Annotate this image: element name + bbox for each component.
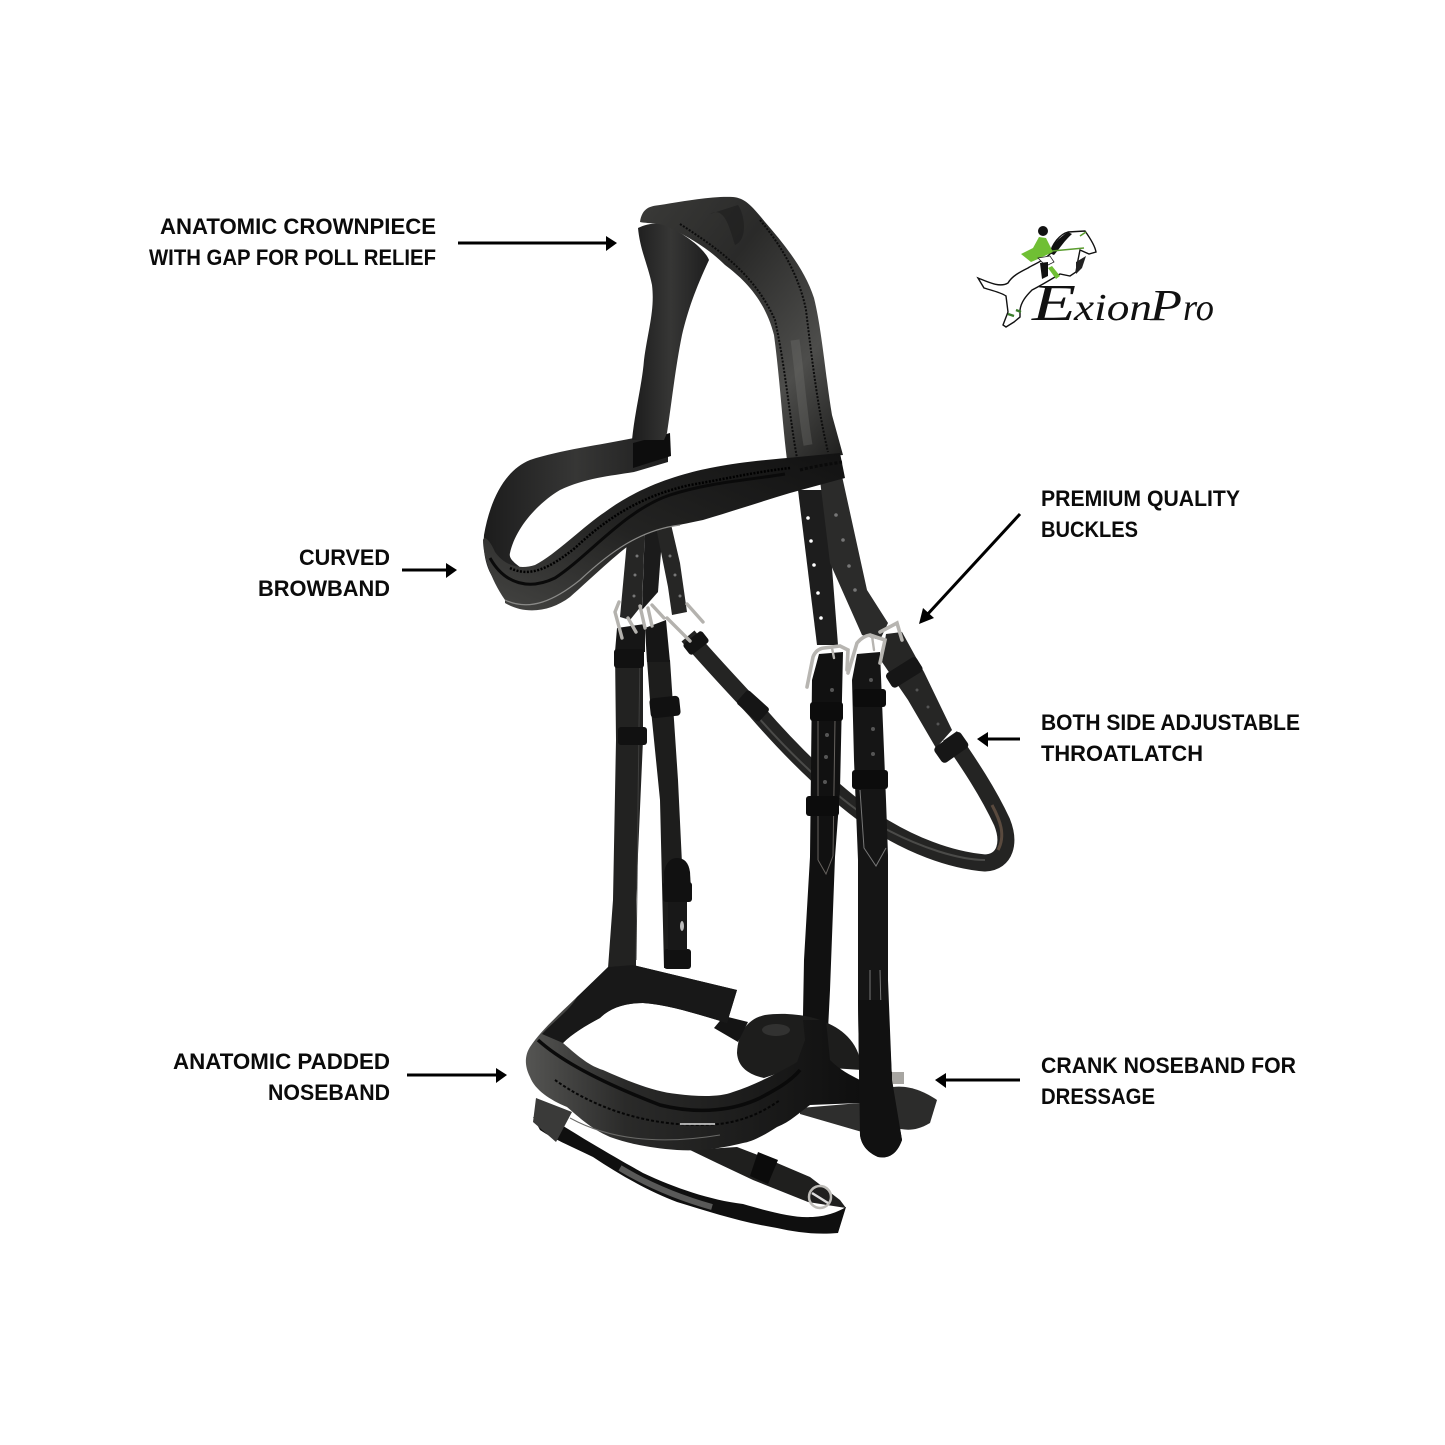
keeper on crown [633,433,671,468]
logo: ExionPro [978,226,1214,332]
logo wordmark: ro [1183,287,1214,329]
throatlatch strap [688,636,1006,863]
left buckles [615,602,703,641]
logo wordmark: E [1031,275,1076,332]
label: crank noseband for dressage [1041,1053,1296,1109]
arrow: browband [402,563,457,578]
logo horse and rider [978,226,1096,327]
label: curved browband [258,545,390,601]
label: anatomic padded noseband [173,1049,390,1105]
crank fitting right [860,1055,937,1130]
label: both side adjustable throatlatch: BOTH SIDE ADJUSTABLE [1041,710,1300,735]
label: anatomic padded noseband: NOSEBAND [268,1080,390,1105]
left keepers [614,630,770,969]
label: both side adjustable throatlatch [1041,710,1300,766]
right keepers [806,656,970,816]
label: both side adjustable throatlatch: THROATLATCH [1041,741,1203,766]
label: curved browband: BROWBAND [258,576,390,601]
front strap tip overlay [858,1000,902,1157]
arrow: crank noseband [935,1073,1020,1088]
left cheek straps [608,620,687,968]
back browband loop [484,436,668,590]
label: premium quality buckles: BUCKLES [1041,517,1138,542]
label: premium quality buckles [1041,486,1240,542]
arrow: buckles [919,514,1020,624]
padded noseband [526,965,860,1150]
label: crank noseband for dressage: DRESSAGE [1041,1084,1155,1109]
front browband [483,453,845,610]
arrow: throatlatch [977,732,1020,747]
label: premium quality buckles: PREMIUM QUALITY [1041,486,1240,511]
right buckle straps [802,632,952,1157]
chin pad and connector [714,1014,862,1078]
right buckles [807,623,902,687]
front crownpiece [640,197,843,460]
rear strap under crank [800,1103,862,1132]
lower noseband strap [533,1098,846,1234]
upper left strap tails [620,520,687,620]
label: anatomic crownpiece: WITH GAP FOR POLL RELIEF [149,245,436,270]
strap holes [823,678,940,784]
logo wordmark [1031,275,1214,332]
arrow: crownpiece [458,236,617,251]
back crown pad [632,224,709,440]
label: curved browband: CURVED [299,545,390,570]
right cheek straps [798,476,888,645]
label: anatomic crownpiece: ANATOMIC CROWNPIECE [160,214,436,239]
label: anatomic padded noseband: ANATOMIC PADDED [173,1049,390,1074]
logo wordmark: P [1149,281,1182,330]
arrow: noseband [407,1068,507,1083]
label: crank noseband for dressage: CRANK NOSEBAND FOR [1041,1053,1296,1078]
logo wordmark: xion [1073,287,1152,329]
bridle illustration [483,197,1006,1234]
label: anatomic crownpiece [149,214,436,270]
